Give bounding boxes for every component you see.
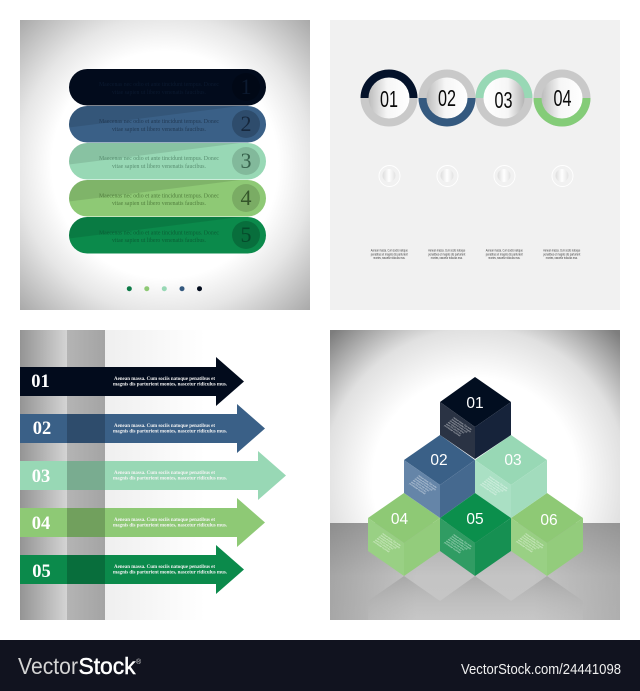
arrow 01: magnis dis parturient montes, nascetur ridiculus mus. — [113, 382, 228, 388]
pill 2: 2 — [240, 111, 252, 136]
cube 01: Aenean massa. Cum sociis — [452, 417, 472, 431]
captions: penatibus et magnis dis parturient — [371, 252, 408, 256]
cube 02 — [404, 435, 475, 518]
cube 04 — [368, 493, 440, 576]
cube 05: etur ridiculus mus donec — [447, 538, 465, 551]
pill 2: Maecenas nec odio et ante tincidunt tempus. Donec — [99, 118, 219, 125]
captions: montes, nascetur ridiculus mus. — [373, 256, 405, 260]
cube 06: 06 — [540, 512, 558, 529]
cube 04: Aenean massa. Cum sociis — [381, 533, 401, 547]
arrow 03: 03 — [32, 467, 50, 487]
captions: Aenean massa. Cum sociis natoque — [428, 248, 465, 252]
cube 05: 05 — [466, 511, 484, 528]
ring 04: 04 — [554, 85, 572, 111]
pill 1: vitae sapien ut libero venenatis faucibus. — [112, 89, 206, 96]
cube 02: pellentesque eu pretium — [408, 482, 427, 495]
pill 3 — [69, 143, 266, 180]
footer url: VectorStock.com/24441098 — [461, 662, 621, 678]
cube 01 — [440, 377, 511, 459]
registered mark: ® — [136, 658, 142, 666]
arrow 05: magnis dis parturient montes, nascetur ridiculus mus. — [113, 570, 228, 576]
cube 02: natoque penatibus et magnis — [415, 476, 437, 491]
cube 05: quam felis ultricies nec — [445, 540, 462, 552]
pill 3: 3 — [240, 148, 252, 173]
pill 4: Maecenas nec odio et ante tincidunt tempus. Donec — [99, 192, 219, 200]
captions: penatibus et magnis dis parturient — [428, 252, 465, 256]
pill 5: vitae sapien ut libero venenatis faucibus. — [112, 237, 206, 244]
cube 04: quam felis ultricies nec — [374, 539, 391, 551]
pagination dots — [127, 286, 202, 291]
pill 4: vitae sapien ut libero venenatis faucibus. — [112, 200, 206, 207]
panel: cube pyramid — [330, 330, 620, 620]
arrow 05: 05 — [32, 562, 51, 582]
arrow 01 — [20, 357, 244, 406]
cube 02: 02 — [430, 452, 448, 469]
panel: numbered rings — [330, 20, 620, 310]
pill 5: Maecenas nec odio et ante tincidunt tempus. Donec — [99, 230, 219, 236]
arrow 02: 02 — [33, 419, 51, 439]
cube 06: Aenean massa. Cum sociis — [524, 533, 544, 547]
captions: Aenean massa. Cum sociis natoque — [371, 248, 408, 252]
cube 02: quam felis ultricies nec — [410, 481, 427, 493]
cube 02: dis parturient montes nasc — [414, 478, 433, 492]
pill 2: vitae sapien ut libero venenatis faucibus. — [112, 126, 206, 133]
pill 4: 4 — [240, 185, 252, 210]
arrow 05: Aenean massa. Cum sociis natoque penatibus et — [114, 565, 215, 570]
cube 03 — [475, 435, 547, 518]
cube 05: dis parturient montes nasc — [449, 537, 468, 551]
arrow 03: Aenean massa. Cum sociis natoque penatibus et — [114, 471, 215, 476]
cube 01: dis parturient montes nasc — [449, 420, 468, 434]
cube 02: etur ridiculus mus donec — [412, 479, 430, 492]
cube 03: Aenean massa. Cum sociis — [488, 476, 508, 490]
arrow 03: magnis dis parturient montes, nascetur ridiculus mus. — [113, 476, 228, 482]
arrow 04 — [20, 498, 265, 547]
footer bar — [0, 640, 640, 691]
cube 03: natoque penatibus et magnis — [486, 477, 508, 492]
captions: montes, nascetur ridiculus mus. — [431, 256, 463, 260]
arrow 04: 04 — [32, 514, 50, 534]
cube 01: natoque penatibus et magnis — [450, 418, 472, 433]
arrow 02: magnis dis parturient montes, nascetur ridiculus mus. — [113, 430, 228, 434]
cube 04: pellentesque eu pretium — [372, 540, 391, 553]
cube 05: natoque penatibus et magnis — [450, 535, 472, 550]
captions: Aenean massa. Cum sociis natoque — [543, 248, 580, 252]
cube 04: dis parturient montes nasc — [378, 536, 397, 550]
cube 03: etur ridiculus mus donec — [483, 480, 501, 493]
cube 04: 04 — [391, 511, 408, 528]
cube 04: etur ridiculus mus donec — [376, 537, 394, 550]
cube 03: dis parturient montes nasc — [485, 479, 504, 493]
panel: arrows — [20, 330, 310, 620]
cube 06: dis parturient montes nasc — [521, 536, 540, 550]
cube 05: Aenean massa. Cum sociis — [452, 534, 472, 548]
pill 1: Maecenas nec odio et ante tincidunt tempus. Donec — [99, 81, 219, 88]
pill 5 — [69, 217, 266, 254]
ring 01 — [360, 70, 418, 126]
ring 02: 02 — [438, 85, 456, 111]
captions: penatibus et magnis dis parturient — [486, 252, 523, 256]
captions: montes, nascetur ridiculus mus. — [488, 256, 520, 260]
cube reflections — [368, 576, 583, 620]
captions: penatibus et magnis dis parturient — [543, 252, 580, 256]
ring 02 — [418, 70, 476, 126]
pill 4 — [69, 180, 266, 216]
cube 01: 01 — [466, 395, 484, 412]
ring 03 — [476, 70, 532, 126]
ring 04 — [534, 70, 590, 127]
pill 2 — [69, 106, 266, 142]
cube 05: pellentesque eu pretium — [443, 541, 462, 554]
cube 04: natoque penatibus et magnis — [379, 534, 401, 549]
arrow 02: Aenean massa. Cum sociis natoque penatibus et — [114, 424, 215, 429]
arrow 04: Aenean massa. Cum sociis natoque penatibus et — [114, 518, 215, 523]
arrow 02 — [20, 404, 265, 453]
footer logo: Vector — [18, 653, 78, 679]
cube 01: etur ridiculus mus donec — [447, 421, 465, 434]
arrow 04: magnis dis parturient montes, nascetur ridiculus mus. — [113, 524, 228, 528]
captions — [371, 248, 580, 260]
cube 03: 03 — [504, 452, 522, 469]
cube 06: natoque penatibus et magnis — [522, 534, 544, 549]
footer logo: Stock — [78, 653, 136, 679]
arrow 03 — [20, 451, 286, 500]
pill 3: Maecenas nec odio et ante tincidunt tempus. Donec — [99, 155, 219, 162]
arrow 05 — [20, 545, 244, 594]
cube 01: quam felis ultricies nec — [445, 423, 462, 435]
ring 01: 01 — [380, 86, 398, 112]
cube 06: quam felis ultricies nec — [517, 539, 534, 551]
cube 03: quam felis ultricies nec — [481, 482, 498, 494]
cube 06: etur ridiculus mus donec — [519, 537, 537, 550]
arrow 01: Aenean massa. Cum sociis natoque penatibus et — [114, 377, 215, 382]
cube 06: pellentesque eu pretium — [515, 540, 534, 553]
pill 1 — [69, 69, 266, 106]
panel: stacked pills — [20, 20, 310, 310]
cube 01: pellentesque eu pretium — [443, 424, 462, 437]
captions: Aenean massa. Cum sociis natoque — [486, 248, 523, 252]
pill 5: 5 — [240, 222, 252, 247]
pill 1: 1 — [240, 74, 252, 99]
cube 02: Aenean massa. Cum sociis — [417, 475, 437, 489]
captions: montes, nascetur ridiculus mus. — [546, 256, 578, 260]
cube 03: pellentesque eu pretium — [479, 483, 498, 496]
dimple buttons — [379, 166, 573, 186]
ring 03: 03 — [494, 87, 512, 113]
cube 05 — [440, 493, 511, 576]
cube 06 — [511, 493, 583, 576]
arrow 01: 01 — [31, 372, 50, 392]
pill 3: vitae sapien ut libero venenatis faucibus. — [112, 163, 206, 170]
